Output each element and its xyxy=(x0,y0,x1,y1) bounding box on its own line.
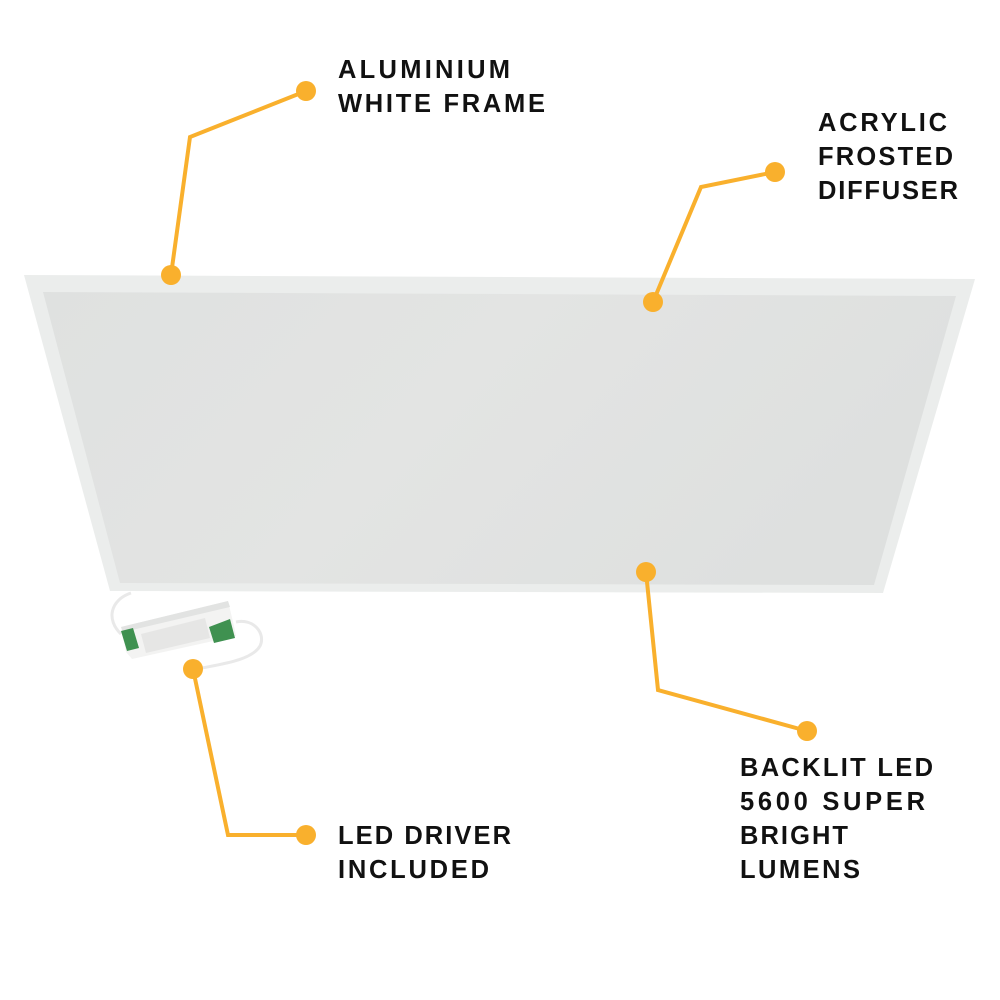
marker dots xyxy=(296,81,316,101)
marker dots xyxy=(765,162,785,182)
label: WHITE FRAME xyxy=(338,90,545,118)
LED driver xyxy=(112,593,262,668)
acrylic diffuser xyxy=(43,292,956,585)
label: ACRYLIC xyxy=(818,109,947,137)
driver cable xyxy=(112,593,262,668)
marker dots xyxy=(636,562,656,582)
marker dots xyxy=(183,659,203,679)
callout: backlit LED xyxy=(636,562,933,884)
label: ALUMINIUM xyxy=(338,56,510,84)
label: BACKLIT LED xyxy=(740,754,933,782)
leader line xyxy=(646,572,807,731)
leader line xyxy=(193,669,306,835)
label: LED DRIVER xyxy=(338,822,511,850)
driver label print xyxy=(141,618,210,653)
driver terminals xyxy=(121,628,139,651)
leader line xyxy=(171,91,306,275)
LED panel xyxy=(24,275,975,593)
callout: LED driver included xyxy=(183,659,511,884)
label: DIFFUSER xyxy=(818,177,958,205)
panel frame xyxy=(24,275,975,593)
label: FROSTED xyxy=(818,143,953,171)
label: 5600 SUPER xyxy=(740,788,925,816)
driver body xyxy=(121,601,236,659)
label: BRIGHT xyxy=(740,822,848,850)
label: INCLUDED xyxy=(338,856,489,884)
leader line xyxy=(653,172,775,302)
callout: acrylic frosted diffuser xyxy=(643,109,958,312)
callout: aluminium white frame xyxy=(161,56,545,285)
label: LUMENS xyxy=(740,856,860,884)
